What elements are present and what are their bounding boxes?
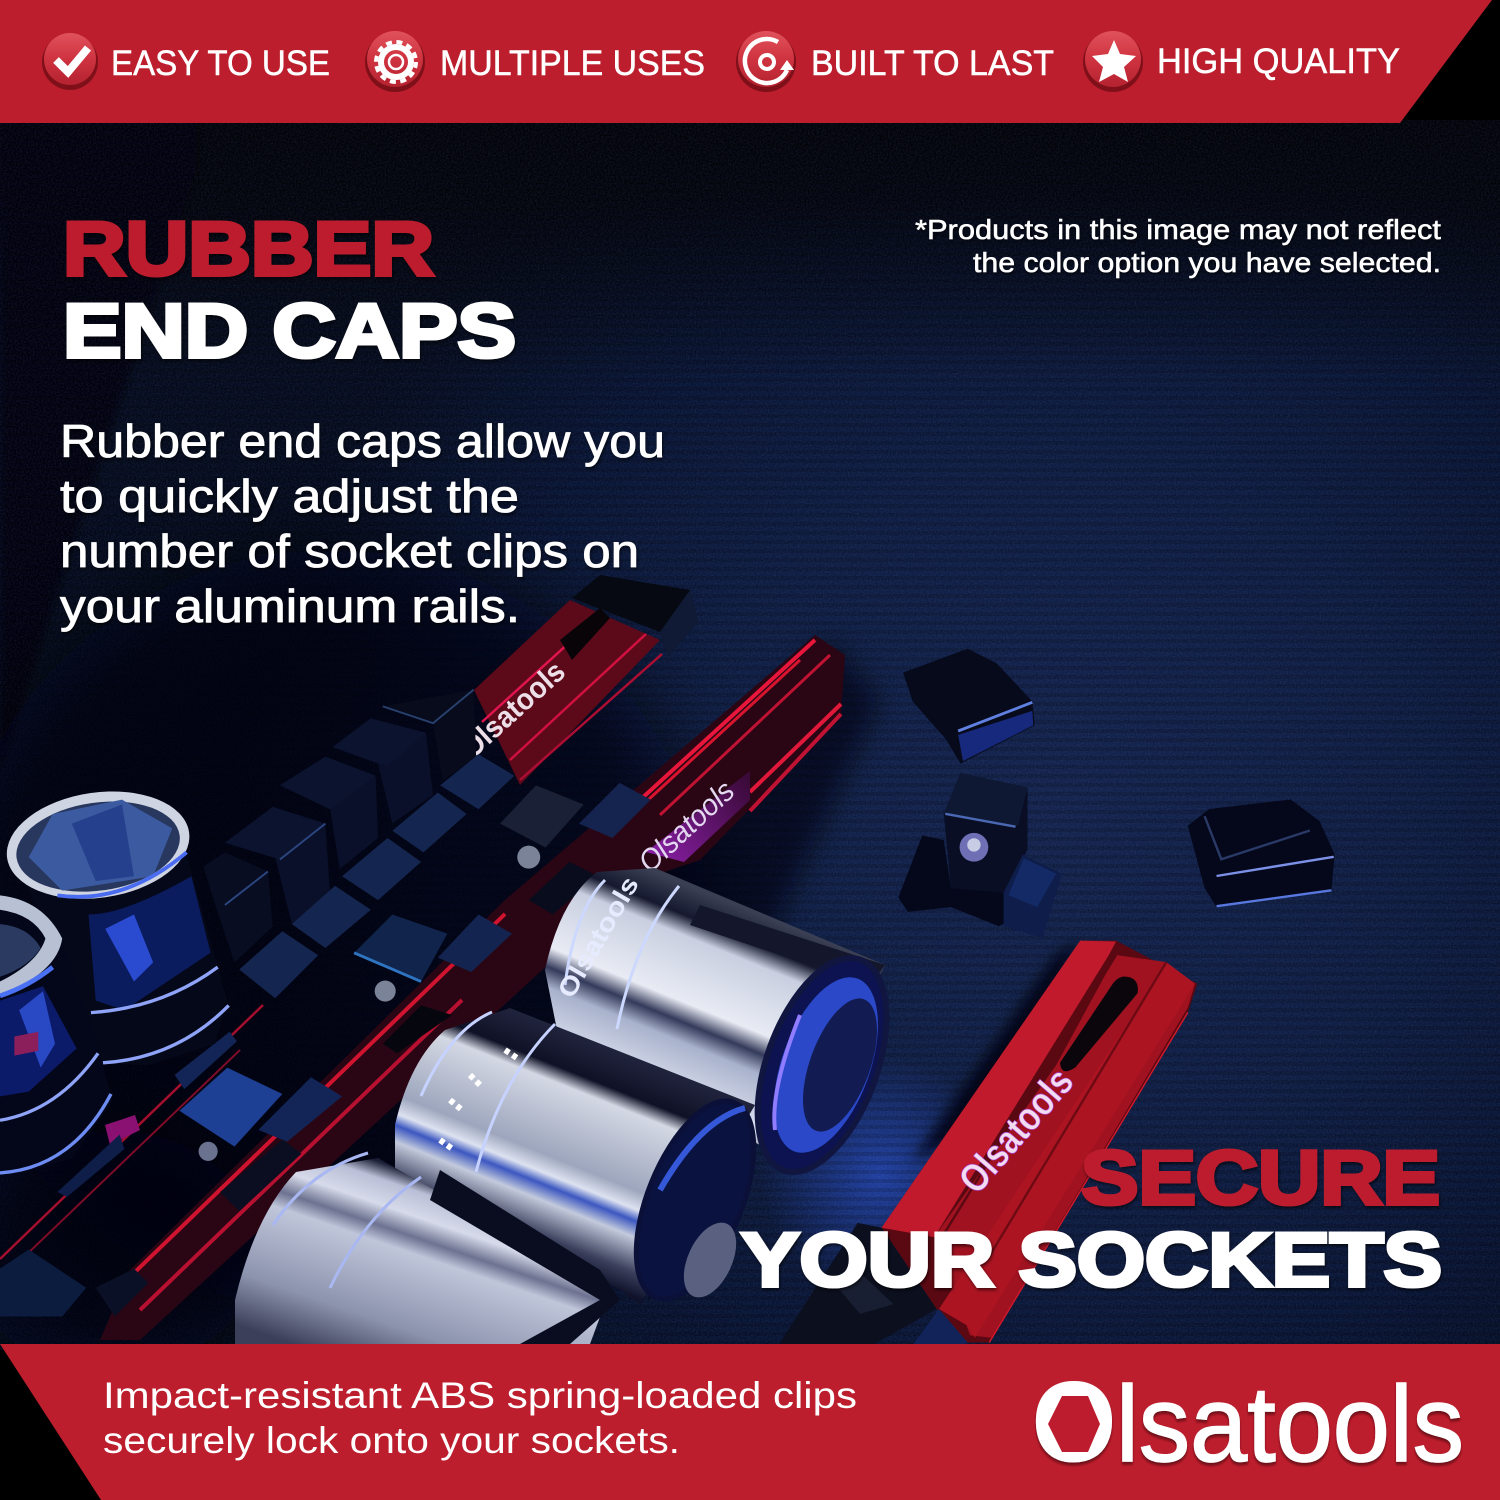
label: multiple uses: MULTIPLE USES xyxy=(440,44,705,83)
body paragraph xyxy=(60,415,665,632)
icon: gear xyxy=(365,31,425,92)
rail 2 logo text: Olsatools xyxy=(632,775,741,879)
loose end cap: right xyxy=(1188,799,1335,907)
socket: chrome rear xyxy=(0,780,229,1065)
heading: secure your sockets: YOUR SOCKETS xyxy=(741,1218,1442,1303)
rail 2: long red rail xyxy=(100,635,845,1340)
engraving on socket: Olsatools xyxy=(551,871,645,1003)
clips on rail 1 and rail 2 xyxy=(0,690,651,1316)
rail 3: red aluminum rail with logo xyxy=(774,941,1197,1352)
rail 1 logo text: Olsatools xyxy=(455,655,572,765)
bottom banner text: Impact-resistant ABS spring-loaded clips xyxy=(103,1375,857,1416)
bottom banner xyxy=(0,1344,1500,1500)
rail 3 logo text: Olsatools xyxy=(951,1060,1082,1202)
icon: star xyxy=(1083,31,1143,92)
socket: chrome far left xyxy=(0,895,112,1180)
disclaimer note: *Products in this image may not reflect xyxy=(915,214,1441,245)
icon: check xyxy=(42,33,98,90)
label: built to last: BUILT TO LAST xyxy=(811,44,1054,83)
socket: front silver xyxy=(235,1153,620,1344)
logo: Olsatools: O xyxy=(1033,1361,1115,1484)
bottom banner text xyxy=(103,1375,857,1461)
heading: secure your sockets: SECURE xyxy=(1081,1136,1440,1221)
rail 1 end cap xyxy=(572,575,698,656)
heading: rubber end caps xyxy=(63,207,516,374)
bottom banner text: securely lock onto your sockets. xyxy=(103,1420,680,1461)
loose end cap: mounted clip xyxy=(898,773,1062,938)
loose end cap: top xyxy=(903,649,1035,764)
label: high quality: HIGH QUALITY xyxy=(1157,42,1400,81)
socket: medium silver xyxy=(395,1008,778,1315)
icon: cycle gear xyxy=(736,31,796,92)
rail 1: upper rail with end cap xyxy=(0,575,698,1280)
body paragraph: to quickly adjust the xyxy=(60,470,519,522)
disclaimer note xyxy=(915,214,1441,278)
retaining ball studs xyxy=(199,846,540,1161)
body paragraph: your aluminum rails. xyxy=(60,580,520,632)
heading: rubber end caps: END CAPS xyxy=(63,289,516,374)
socket: large silver xyxy=(545,868,912,1189)
disclaimer note: the color option you have selected. xyxy=(973,247,1441,278)
heading: rubber end caps: RUBBER xyxy=(63,207,434,292)
body paragraph: Rubber end caps allow you xyxy=(60,415,665,467)
top banner xyxy=(0,0,1492,123)
body paragraph: number of socket clips on xyxy=(60,525,639,577)
heading: secure your sockets xyxy=(741,1136,1442,1303)
logo: Olsatools: lsatools xyxy=(1116,1363,1464,1484)
label: easy to use: EASY TO USE xyxy=(111,44,330,83)
